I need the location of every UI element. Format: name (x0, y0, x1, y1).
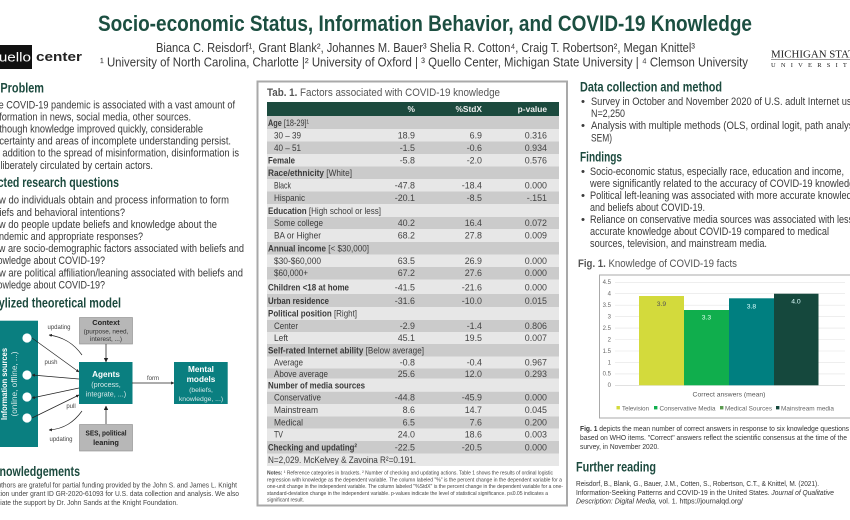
box: mental models: knowledge, ...) (179, 396, 223, 403)
table rows: 63.5 (398, 256, 415, 266)
legend (616, 405, 834, 412)
figure title: Fig. 1. Knowledge of COVID-19 facts (578, 258, 737, 270)
text block: findings bullets: • (581, 190, 585, 202)
gridlines and y axis: 1.5 (603, 349, 612, 355)
box: information sources (0, 321, 38, 447)
table rows: -21.6 (462, 282, 482, 292)
logo: Quello Center (0, 45, 82, 69)
table rows: 24.0 (398, 430, 415, 440)
bar: Conservative Media 3.3 (684, 310, 729, 385)
panel: selected research questions (0, 175, 244, 292)
legend: Conservative Media (660, 405, 716, 412)
heading: data collection and method: Data collection and method (580, 80, 722, 95)
table rows: Urban residence (268, 295, 329, 306)
table rows: Age [18-29]¹ (268, 117, 309, 128)
logo: Michigan State University (771, 50, 850, 69)
figure note (580, 424, 849, 451)
table rows: -47.8 (395, 180, 415, 190)
text block: findings bullets: sources, television, and mainstream media. (590, 238, 767, 250)
legend: Television (622, 405, 649, 412)
text block: research questions (0, 194, 244, 292)
table rows: 0.000 (525, 442, 547, 452)
table rows: Conservative (274, 392, 321, 402)
table rows: 0.045 (525, 405, 547, 415)
text block: method bullets: SEM) (591, 132, 612, 144)
table notes: standard-deviation change in the independent variable. p-values indicate the level of statistical significance. p≤0.05 indicates a (267, 491, 549, 497)
table rows: Education [High school or less] (268, 205, 381, 216)
table rows: Black (274, 180, 291, 190)
bar: Medical Sources 3.8 (729, 298, 774, 385)
gridlines and y axis: 2.5 (603, 326, 612, 332)
text block: citation (576, 479, 834, 506)
table rows: -0.4 (467, 358, 482, 368)
text block: findings bullets: and beliefs about COVID-19. (590, 202, 705, 214)
table rows: -44.8 (395, 392, 415, 402)
table rows: N=2,029. McKelvey & Zavoina R²=0.191. (268, 454, 416, 465)
table rows: 45.1 (398, 333, 415, 343)
table rows: 0.316 (525, 130, 547, 140)
box: agents: (process, (91, 380, 121, 389)
table rows: Female (268, 154, 295, 166)
panel: table of factors (258, 82, 567, 506)
table rows: 6.9 (470, 130, 482, 140)
table rows: -2.9 (400, 321, 415, 331)
table rows: -10.0 (462, 296, 482, 306)
text block: problem statement (0, 100, 239, 172)
text block: acknowledgements: Authors are grateful for partial funding provided by the John S. and James L. Knight (0, 480, 237, 490)
text block: method bullets (581, 96, 850, 144)
table rows: 0.576 (525, 156, 547, 166)
table rows: Center (274, 320, 298, 331)
text block: method bullets: • (581, 96, 585, 108)
box: agents (79, 362, 132, 404)
table rows: 26.9 (465, 256, 482, 266)
arrows: model connections (32, 335, 174, 430)
bar: Television 3.9: 3.9 (657, 301, 666, 308)
text block: problem statement: In addition to the spread of misinformation, disinformation is (0, 148, 239, 160)
table rows: -18.4 (462, 180, 482, 190)
text block: findings bullets (581, 166, 850, 250)
table notes: significant result. (267, 498, 304, 504)
figure note: survey, in November 2020. (580, 442, 659, 451)
text block: method bullets: • (581, 120, 585, 132)
table rows: 0.000 (525, 282, 547, 292)
table rows: Hispanic (274, 192, 305, 203)
table rows: Medical (274, 416, 303, 427)
table rows: Political position [Right] (268, 308, 357, 318)
table rows: Children <18 at home (268, 281, 349, 292)
table rows: Above average (274, 368, 328, 379)
table rows: Checking and updating² (268, 442, 357, 452)
gridlines and y axis: 4.5 (603, 280, 612, 286)
heading: further reading: Further reading (576, 459, 656, 475)
text block: acknowledgements (0, 480, 239, 507)
box: context: interest, ...) (90, 336, 122, 343)
table rows: 19.5 (465, 333, 482, 343)
table rows: -.151 (527, 193, 547, 203)
text block: findings bullets: • (581, 166, 585, 178)
table rows: 7.6 (470, 417, 482, 427)
gridlines and y axis: 3 (608, 314, 612, 320)
table rows: 0.200 (525, 417, 547, 427)
table title: Tab. 1. Factors associated with COVID-19 knowledge (267, 87, 500, 99)
table rows: 0.967 (525, 358, 547, 368)
table rows: -8.5 (467, 193, 482, 203)
table rows: 0.293 (525, 369, 547, 379)
box: agents: integrate, ...) (86, 390, 126, 398)
table rows: 25.6 (398, 369, 415, 379)
gridlines and y axis (603, 280, 845, 389)
table rows: -20.5 (462, 442, 482, 452)
table rows: 18.6 (465, 430, 482, 440)
gridlines and y axis: 0.5 (603, 372, 612, 378)
table rows: -31.6 (395, 296, 415, 306)
table rows: -0.6 (467, 143, 482, 153)
table rows: 6.5 (403, 417, 415, 427)
panel: findings (580, 150, 850, 250)
axis title: Correct answers (mean) (693, 392, 765, 398)
table rows: 12.0 (465, 369, 482, 379)
table rows: 0.015 (525, 296, 547, 306)
table rows: 0.000 (525, 180, 547, 190)
table rows: Mainstream (274, 404, 318, 415)
table rows: 0.000 (525, 268, 547, 278)
table rows: -2.0 (467, 156, 482, 166)
table rows: Race/ethnicity [White] (268, 167, 352, 178)
table header: %StdX (455, 104, 482, 114)
table rows: 67.2 (398, 268, 415, 278)
panel: the problem (0, 80, 239, 172)
table rows: -5.8 (400, 156, 415, 166)
labels: arrow captions (44, 325, 159, 443)
table rows: 0.009 (525, 231, 547, 241)
table header: p-value (518, 104, 547, 114)
table rows: TV (274, 428, 284, 440)
table rows: -45.9 (462, 392, 482, 402)
bar: Medical Sources 3.8: 3.8 (747, 304, 756, 310)
bar chart: knowledge of COVID-19 facts (600, 275, 850, 418)
table rows: -41.5 (395, 282, 415, 292)
box: context (80, 318, 132, 344)
legend: Medical Sources (725, 405, 773, 412)
table header: % (408, 104, 416, 114)
legend: Mainstream media (781, 405, 834, 412)
title: Socio-economic Status, Information Behavior, and COVID-19 Knowledge (98, 11, 752, 36)
table rows: $30-$60,000 (274, 255, 321, 266)
labels: arrow captions: form (147, 376, 159, 382)
table rows: 16.4 (465, 218, 482, 228)
box: context: Context (92, 318, 120, 327)
table rows: 18.9 (398, 130, 415, 140)
box: mental models: (beliefs, (189, 387, 213, 394)
bar: Television 3.9 (639, 296, 684, 385)
table rows: 0.007 (525, 333, 547, 343)
table rows: 14.7 (465, 405, 482, 415)
table rows: Average (274, 357, 303, 368)
table rows: BA or Higher (274, 230, 321, 241)
panel: stylized theoretical model (0, 296, 228, 451)
text block: citation: Information-Seeking Patterns and COVID-19 in the United States. Journal of Qualitative (576, 488, 834, 497)
table rows: 0.072 (525, 218, 547, 228)
table rows: $60,000+ (274, 267, 308, 278)
text block: findings bullets: • (581, 214, 585, 226)
text block: citation: Description: Digital Media, vol. 1. https://journalqd.org/ (576, 496, 744, 506)
table rows: 40.2 (398, 218, 415, 228)
text block: method bullets: N=2,250 (591, 108, 625, 120)
box: SES, political leaning: SES, political (86, 428, 126, 438)
panel: further reading (576, 459, 834, 506)
table rows: 30 – 39 (274, 130, 301, 140)
text block: citation: Reisdorf, B., Blank, G., Bauer, J.M., Cotten, S., Robertson, C.T., & Knittel, M. (2021). (576, 479, 819, 488)
table header (267, 102, 559, 116)
labels: arrow captions: pull (66, 404, 76, 410)
box: mental models: Mental (188, 365, 214, 374)
gridlines and y axis: 0 (608, 383, 612, 389)
gridlines and y axis: 2 (608, 338, 612, 344)
table rows: 0.000 (525, 392, 547, 402)
gridlines and y axis: 3.5 (603, 303, 612, 309)
table rows: -20.1 (395, 193, 415, 203)
logo: Quello Center: center (36, 49, 82, 64)
box: information sources: (online, offline, ...) (9, 351, 19, 416)
table rows: 68.2 (398, 231, 415, 241)
labels: arrow captions: push (44, 360, 58, 366)
table notes: one-unit change in the independent variable. The column labeled "%StdX" is the percent change in the dependent variable for a one- (267, 484, 563, 490)
box: mental models: models (187, 375, 216, 384)
gridlines and y axis: 1 (608, 360, 612, 366)
panel: acknowledgements (0, 464, 239, 507)
bar: Mainstream media 4.0 (774, 294, 818, 385)
table rows: Left (274, 332, 288, 343)
box: agents: Agents (92, 370, 120, 379)
table rows: 0.003 (525, 430, 547, 440)
table notes: regression with knowledge as the dependent variable. The column labeled "%" is the percent change in the dependent variable for a (267, 478, 563, 484)
table rows: Self-rated Internet ability [Below average] (268, 344, 424, 356)
table rows: Some college (274, 217, 323, 228)
box: SES, political leaning (80, 424, 132, 451)
table notes: Notes: ¹ Reference categories in brackets. ² Number of checking and updating actions. Table 1 shows the results of ordinal logistic (267, 470, 553, 476)
table rows: -1.4 (467, 321, 482, 331)
table rows: 0.806 (525, 321, 547, 331)
bar: Mainstream media 4.0: 4.0 (791, 298, 801, 306)
labels: arrow captions: updating (47, 325, 71, 331)
table rows (267, 116, 559, 466)
table rows: Number of media sources (268, 380, 365, 390)
table rows: -0.8 (400, 358, 415, 368)
table rows: -22.5 (395, 442, 415, 452)
labels: arrow captions: updating (49, 437, 73, 443)
box: context: (purpose, need, (84, 328, 129, 336)
gridlines and y axis: 4 (608, 292, 612, 298)
table rows: 40 – 51 (274, 142, 301, 153)
table notes (267, 470, 563, 504)
heading: findings: Findings (580, 150, 622, 165)
panel: data collection and method (580, 80, 850, 144)
table rows: 8.6 (403, 405, 415, 415)
table rows: -1.5 (400, 143, 415, 153)
box: SES, political leaning: leaning (93, 438, 119, 447)
table rows: 0.934 (525, 143, 547, 153)
bar: Conservative Media 3.3: 3.3 (702, 314, 711, 322)
authors: Bianca C. Reisdorf¹, Grant Blank², Johannes M. Bauer³ Shelia R. Cotton⁴, Craig T. Robertson², Megan Knittel³ (156, 41, 695, 55)
box: mental models (174, 362, 228, 404)
table rows: 27.8 (465, 231, 482, 241)
table rows: Annual income [< $30,000] (268, 242, 369, 253)
table rows: 0.000 (525, 256, 547, 266)
affiliations: ¹ University of North Carolina, Charlotte |² University of Oxford | ³ Quello Center, Michigan State University | ⁴ Clemson University (100, 56, 749, 70)
table rows: 27.6 (465, 268, 482, 278)
